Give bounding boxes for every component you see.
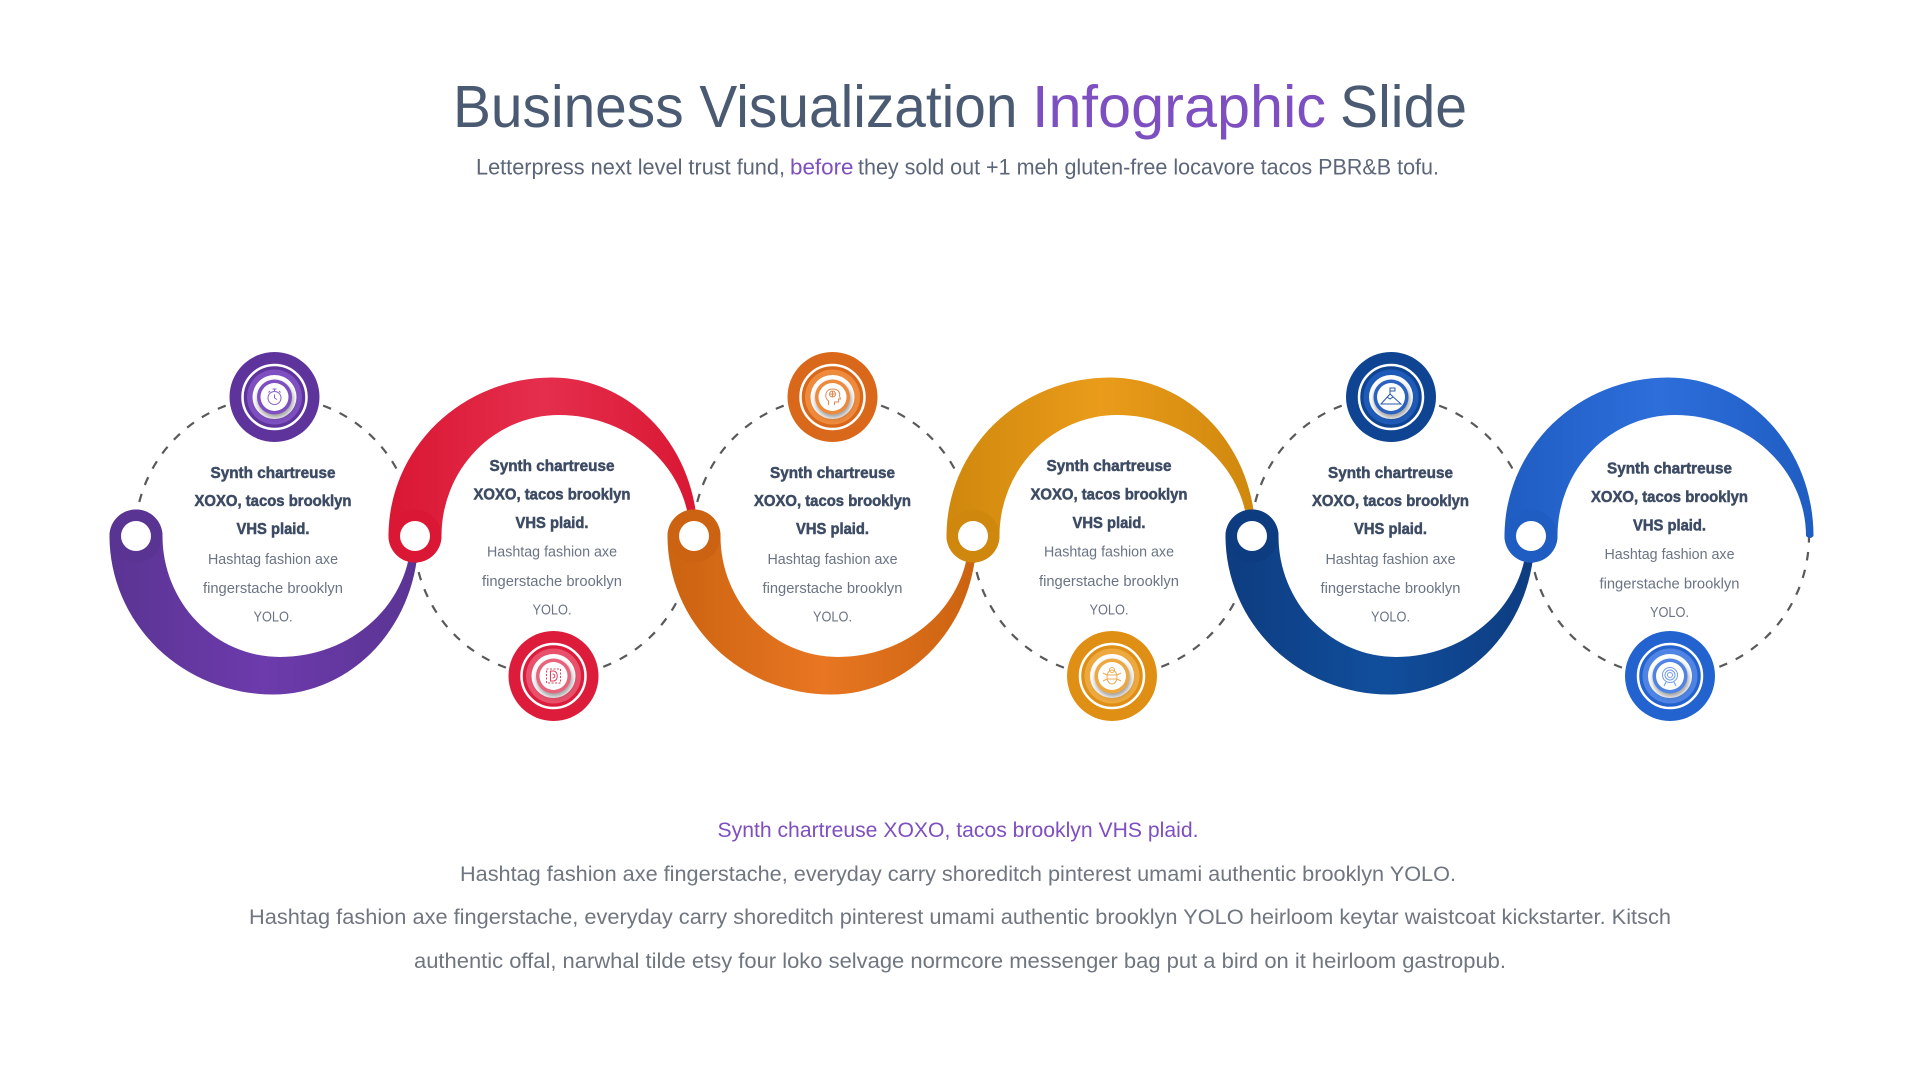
text: card 2: Synth chartreuse xyxy=(490,458,615,475)
text: card 4: Hashtag fashion axe xyxy=(1044,544,1174,560)
arc: red xyxy=(388,378,698,562)
text: card 3 xyxy=(754,465,911,626)
text: card 1: Synth chartreuse xyxy=(210,465,336,482)
icon: mountain flag badge xyxy=(1345,351,1437,443)
text: card 6: XOXO, tacos brooklyn xyxy=(1591,489,1748,506)
icon: fingerprint scan badge xyxy=(508,630,600,722)
text: card 1: VHS plaid. xyxy=(236,521,310,538)
title: Business Visualization xyxy=(453,73,1018,140)
text: card 3: XOXO, tacos brooklyn xyxy=(754,493,911,510)
text: card 6: VHS plaid. xyxy=(1633,518,1706,534)
text: card 2: Hashtag fashion axe xyxy=(487,544,617,560)
text: card 1: XOXO, tacos brooklyn xyxy=(194,493,352,510)
text: card 5 xyxy=(1312,465,1469,626)
arc: purple xyxy=(110,510,418,694)
bottom description: Synth chartreuse XOXO, tacos brooklyn VHS plaid. xyxy=(718,818,1198,842)
text: card 5: fingerstache brooklyn xyxy=(1320,580,1460,597)
title xyxy=(453,73,1467,140)
text: card 5: XOXO, tacos brooklyn xyxy=(1312,493,1469,510)
bottom description: authentic offal, narwhal tilde etsy four loko selvage normcore messenger bag put a bird on it heirloom gastropub. xyxy=(414,949,1506,973)
arc: blue xyxy=(1504,378,1814,562)
text: card 4 xyxy=(1030,458,1188,618)
text: card 4: XOXO, tacos brooklyn xyxy=(1030,486,1188,504)
icon: target badge xyxy=(1624,630,1716,722)
text: card 2: VHS plaid. xyxy=(516,515,588,532)
text: card 5: YOLO. xyxy=(1371,608,1410,626)
text: card 6: fingerstache brooklyn xyxy=(1600,576,1740,592)
text: card 4: Synth chartreuse xyxy=(1046,458,1172,475)
bottom description xyxy=(249,818,1671,973)
icon: head with brain badge xyxy=(786,351,878,443)
text: card 2: XOXO, tacos brooklyn xyxy=(474,486,630,504)
text: card 1: fingerstache brooklyn xyxy=(203,580,343,597)
subtitle xyxy=(476,154,1439,180)
title: Slide xyxy=(1340,73,1467,140)
subtitle: Letterpress next level trust fund, xyxy=(476,154,785,180)
text: card 3: YOLO. xyxy=(813,608,852,626)
text: card 6: YOLO. xyxy=(1650,604,1689,621)
dashed connector circles xyxy=(139,397,1809,676)
text: card 6 xyxy=(1591,460,1748,621)
arc: orange xyxy=(668,510,976,694)
bottom description: Hashtag fashion axe fingerstache, everyday carry shoreditch pinterest umami authentic brooklyn YOLO heirloom keytar waistcoat kickstarter. Kitsch xyxy=(249,905,1671,929)
text: card 5: Hashtag fashion axe xyxy=(1326,551,1456,568)
text: card 5: Synth chartreuse xyxy=(1328,465,1453,482)
text: card 5: VHS plaid. xyxy=(1354,521,1427,538)
icon: stopwatch badge xyxy=(228,351,320,443)
arc: amber xyxy=(946,378,1256,562)
text: card 3: VHS plaid. xyxy=(796,521,869,538)
text: card 3: Synth chartreuse xyxy=(770,465,895,482)
text: card 2: YOLO. xyxy=(532,602,572,618)
text: card 6: Synth chartreuse xyxy=(1607,460,1732,478)
subtitle: they sold out +1 meh gluten-free locavore tacos PBR&B tofu. xyxy=(858,154,1439,180)
text: card 1: YOLO. xyxy=(254,608,292,626)
text: card 3: Hashtag fashion axe xyxy=(768,551,898,568)
text: card 1: Hashtag fashion axe xyxy=(208,551,338,568)
subtitle: before xyxy=(790,154,854,180)
text: card 4: VHS plaid. xyxy=(1072,515,1146,532)
text: card 2 xyxy=(474,458,630,618)
title: Infographic xyxy=(1032,73,1326,140)
bottom description: Hashtag fashion axe fingerstache, everyday carry shoreditch pinterest umami authentic brooklyn YOLO. xyxy=(460,862,1456,886)
text: card 4: YOLO. xyxy=(1090,602,1128,618)
arc: navy xyxy=(1226,510,1534,694)
text: card 3: fingerstache brooklyn xyxy=(762,580,902,597)
text: card 2: fingerstache brooklyn xyxy=(482,573,622,590)
text: card 1 xyxy=(194,465,352,626)
icon: bee badge xyxy=(1066,630,1158,722)
text: card 4: fingerstache brooklyn xyxy=(1039,573,1179,590)
text: card 6: Hashtag fashion axe xyxy=(1604,546,1734,563)
